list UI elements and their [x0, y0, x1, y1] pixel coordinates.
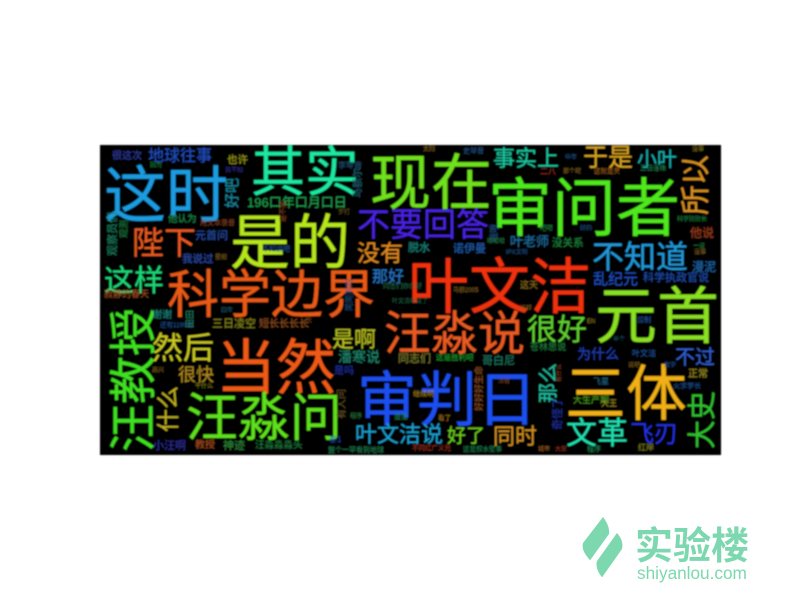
- small words: 三日连珠: [640, 163, 666, 172]
- small words: 吧嗒: [540, 224, 554, 232]
- small words: 科学执政官说: [643, 270, 709, 284]
- small words: 高兴: [152, 366, 164, 374]
- small words: 数字: [664, 361, 676, 369]
- small words: 汪淼淼淼头: [255, 439, 303, 451]
- small words: 用文本录音: [200, 218, 235, 227]
- medium words: 好吧: [224, 178, 241, 208]
- small words: 这就是灵: [594, 166, 620, 175]
- logo url: shiyanlou.com: [637, 563, 747, 583]
- large words: 其实: [251, 143, 359, 203]
- small words: 诺伊曼: [453, 242, 486, 255]
- medium words: 同时: [493, 424, 537, 449]
- small words: 这是叙水壁事: [463, 444, 502, 453]
- small words: 看了: [438, 414, 451, 422]
- small words: 很这次: [112, 149, 142, 162]
- small words: 程序: [587, 444, 601, 453]
- medium words: 小叶: [637, 148, 677, 171]
- small words: 活着: [498, 377, 510, 385]
- medium words: 那好: [372, 268, 404, 286]
- small words: 星舰: [215, 253, 227, 261]
- small words: 哈哈哈: [487, 237, 505, 245]
- small words: 没关系: [552, 236, 584, 249]
- small words: 好的: [580, 224, 592, 232]
- medium words: 196口年口月口日: [247, 195, 347, 210]
- small words: 干什么: [195, 382, 213, 390]
- small words: 苍林思说: [530, 341, 566, 352]
- small words: 那个呢: [563, 167, 581, 175]
- small words: 没事: [692, 145, 704, 153]
- large words: 科学边界: [167, 267, 375, 325]
- small words: 罗打: [338, 208, 350, 216]
- medium words: 不知道: [592, 239, 688, 275]
- medium words: [104, 144, 719, 451]
- small words: 不同红广义元: [412, 443, 452, 452]
- small words: 寂静的春天: [104, 288, 149, 299]
- small words: 奇怪了: [550, 397, 564, 430]
- medium words: 于是: [583, 144, 633, 172]
- small words: 这是胜利吧: [436, 352, 474, 362]
- small words: 飞星: [593, 377, 609, 386]
- medium words: 飞刃: [630, 421, 678, 448]
- small words: 不知道吧: [262, 244, 290, 253]
- small words: 元首问: [195, 228, 228, 242]
- large words: 汪淼说: [384, 307, 525, 360]
- medium words: 很好: [527, 314, 587, 347]
- medium words: 潘寒说: [338, 349, 380, 365]
- small words: 他认为: [168, 213, 197, 225]
- small words: IPX文明: [506, 248, 528, 256]
- small words: 马额2005: [453, 286, 479, 294]
- logo: shiyanlou: [583, 517, 749, 583]
- small words: 教授: [195, 438, 215, 451]
- small words: 半个: [613, 335, 625, 343]
- medium words: 大史: [686, 391, 719, 449]
- small words: 没事: [694, 248, 706, 256]
- small words: 还有1199年: [160, 320, 194, 329]
- small words: 叶文洁听说了: [392, 297, 428, 305]
- small words: 是吗: [334, 365, 354, 377]
- small words: 史琴音: [463, 146, 484, 155]
- small words: 我说过: [182, 252, 214, 265]
- small words: 这样: [520, 304, 532, 312]
- small words: 哦哦: [488, 224, 499, 242]
- small words: EN: [587, 319, 595, 325]
- medium words: 陛下: [132, 225, 196, 261]
- small words: 同同同同: [345, 279, 354, 311]
- small words: 长: [305, 315, 312, 324]
- small words: 有人问: [335, 389, 348, 419]
- large words: 汪教授: [108, 308, 161, 452]
- small words: 同志们: [398, 351, 431, 365]
- small words: 太阳: [423, 145, 435, 153]
- medium words: 所以: [680, 155, 713, 215]
- small words: 他说: [690, 225, 714, 240]
- small words: 三日凌空: [212, 316, 256, 330]
- small words: 李琴音: [338, 160, 362, 170]
- small words: 谢谢: [152, 308, 172, 321]
- small words: 有什么: [555, 364, 563, 382]
- medium words: 很快: [178, 365, 214, 385]
- small words: 也许: [227, 153, 248, 166]
- medium words: 乱纪元: [593, 271, 638, 288]
- small words: 短长长长长: [259, 317, 309, 330]
- medium words: 叶文洁说: [355, 422, 443, 447]
- small words: 说吧: [628, 361, 640, 369]
- small words: 大王: [601, 398, 617, 408]
- large words: 现在: [370, 149, 492, 217]
- small words: 泰1: [329, 434, 342, 444]
- small words: 程序: [350, 412, 362, 420]
- small words: 哥白尼: [482, 353, 515, 367]
- large words: 审判日: [357, 367, 537, 434]
- medium words: 为什么: [577, 346, 619, 362]
- large words: 叶文洁: [408, 253, 591, 321]
- small words: 继续啊: [413, 389, 434, 398]
- large words: 审问者: [488, 173, 680, 245]
- small words: 正常: [688, 367, 708, 380]
- medium words: 什么: [155, 386, 181, 432]
- large words: 元首: [595, 283, 719, 352]
- small words: 二八: [540, 167, 556, 176]
- large words: 汪淼问: [186, 390, 342, 448]
- logo wordmark: 实验楼: [635, 526, 749, 568]
- small words: [104, 145, 716, 454]
- medium words: 事实上: [493, 146, 559, 171]
- small words: 火求学长: [673, 381, 701, 390]
- small words: 蛋蛋: [394, 412, 408, 421]
- small words: 马额尔: [351, 168, 364, 198]
- small words: 红岸: [638, 442, 654, 452]
- medium words: 不过: [675, 346, 715, 369]
- medium words: 好了: [447, 425, 485, 447]
- word cloud panel: [100, 143, 721, 455]
- medium words: 那么: [538, 363, 560, 403]
- medium words: 是啊: [332, 327, 376, 352]
- small words: 因为: [150, 161, 162, 169]
- small words: 观测: [119, 220, 129, 238]
- small words: 这天: [520, 279, 538, 290]
- small words: 漫泥: [692, 260, 716, 274]
- small words: 小汪啊: [153, 439, 186, 452]
- large words: 三体: [565, 360, 687, 428]
- medium words: 这样: [104, 265, 164, 298]
- small words: 田田: [185, 310, 195, 328]
- medium words: 没有: [357, 240, 403, 266]
- small words: 科学院院长: [677, 215, 707, 223]
- small words: 整个一罕看到地球: [328, 445, 384, 454]
- small words: 我不知: [225, 166, 243, 174]
- small words: 好好好生命: [473, 366, 484, 411]
- icon: twin leaves: [583, 517, 622, 577]
- small words: 城市: [538, 445, 550, 453]
- small words: 中年: [565, 153, 577, 161]
- small words: 四年: [221, 306, 233, 314]
- medium words: 然后: [152, 331, 214, 366]
- small words: 大生产期: [573, 394, 609, 405]
- small words: 叶老师: [510, 234, 549, 249]
- medium words: 文革: [566, 416, 628, 451]
- small words: 是不是: [279, 201, 287, 222]
- large words: 这时: [104, 162, 228, 231]
- small words: 控制: [637, 315, 651, 324]
- large words: [104, 143, 719, 452]
- large words: 是的: [230, 210, 350, 277]
- medium words: 不要回答: [357, 206, 489, 243]
- small words: 同志们你们好: [383, 281, 422, 290]
- small words: 神迹: [223, 438, 245, 452]
- small words: 脱水: [408, 240, 430, 254]
- small words: 大家: [555, 445, 567, 453]
- medium words: 地球往事: [148, 147, 212, 165]
- small words: 一说: [693, 242, 705, 250]
- large words: 当然: [216, 335, 336, 402]
- small words: 叶文洁: [632, 348, 656, 358]
- small words: 观察员们: [105, 212, 119, 256]
